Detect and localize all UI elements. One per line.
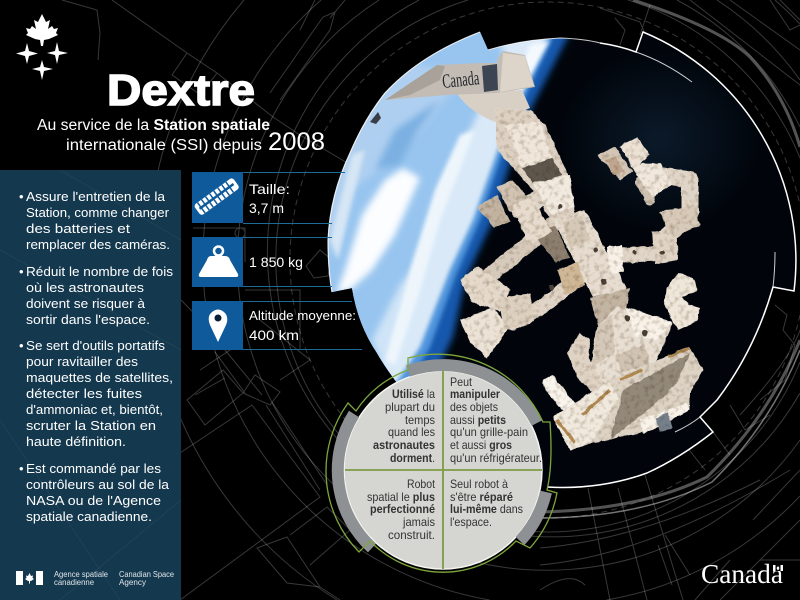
fact: most advanced robot — [367, 477, 436, 542]
left upper hand — [477, 195, 510, 228]
right arm hand cubes — [597, 147, 633, 180]
Dextre robot — [460, 108, 703, 450]
size text — [249, 181, 290, 216]
fact: handles small and large objects: qu'un réfrigérateur. — [450, 451, 542, 465]
stat: mass — [192, 237, 303, 287]
icon: wordmark flag — [773, 565, 783, 571]
fact: handles small and large objects — [450, 375, 542, 465]
agency name in French — [54, 570, 109, 587]
fact: used while astronauts sleep: dorment. — [390, 451, 435, 465]
fact: repaired itself — [450, 477, 523, 529]
fact: most advanced robot: jamais — [402, 515, 435, 529]
icon: right star — [47, 42, 68, 64]
fact: handles small and large objects: manipuler — [450, 387, 500, 401]
bullet: tools: scruter la Station en — [26, 418, 156, 433]
arm links — [490, 172, 690, 323]
bullet: tools: haute définition. — [26, 434, 126, 449]
agency name in English — [119, 570, 175, 587]
fact: used while astronauts sleep: quand les — [388, 425, 435, 439]
icon: maple leaf — [26, 14, 58, 46]
bullet: tools: maquettes de satellites, — [26, 370, 173, 385]
bolts and dark details — [548, 204, 664, 336]
fact: most advanced robot: construit. — [388, 528, 435, 542]
bullet: controllers: spatiale canadienne. — [26, 509, 152, 524]
logo: maple leaf and stars — [16, 14, 68, 80]
tool pallet — [553, 347, 703, 450]
Canada label on boom: Canada — [441, 67, 480, 93]
subtitle: Au service de la Station spatiale — [37, 117, 270, 134]
white rod — [542, 375, 575, 410]
agency name in French: Agence spatiale — [54, 570, 109, 579]
bullet: tools: Se sert d'outils portatifs — [26, 338, 166, 353]
fact: repaired itself: Seul robot à — [450, 477, 508, 491]
bullet: maintenance: des batteries et — [26, 221, 130, 236]
agency name in French: canadienne — [54, 578, 95, 587]
panel: description background — [0, 170, 181, 600]
centre block — [553, 210, 627, 297]
agency signature — [16, 570, 175, 587]
bullet: tools — [19, 338, 173, 449]
bullet: tools: d'ammoniac et, bientôt, — [26, 402, 163, 417]
icon: Dextre length — [192, 172, 243, 223]
cross divider — [345, 371, 542, 569]
bullet: controllers: NASA ou de l'Agence — [26, 493, 161, 508]
dark fragment at photo edge — [370, 112, 381, 124]
bullet: maintenance: Station, comme changer — [26, 205, 170, 220]
bullet: spacewalks: sortir dans l'espace. — [26, 312, 150, 327]
photo: Dextre in orbit above Earth — [328, 32, 795, 487]
earth and atmosphere — [328, 32, 572, 382]
light disc — [344, 371, 542, 569]
white photo frame arcs — [328, 32, 796, 487]
bullet: spacewalks: • — [19, 264, 24, 279]
bullet: tools: pour ravitailler des — [26, 354, 139, 369]
lower torso — [590, 306, 672, 384]
panel: bullet list — [19, 189, 174, 524]
fact: handles small and large objects: aussi petits — [450, 413, 506, 427]
fact: repaired itself: s'être réparé — [450, 490, 513, 504]
bullet: tools: détecter les fuites — [26, 386, 143, 401]
altitude text — [249, 308, 356, 343]
bullet: spacewalks: où les astronautes — [26, 280, 145, 295]
fact: used while astronauts sleep — [373, 387, 435, 465]
subtitle: 2008 — [268, 128, 325, 156]
fact: most advanced robot: spatial le plus — [367, 490, 435, 504]
stat: altitude — [192, 301, 356, 350]
icon: Canadian flag — [16, 571, 43, 585]
fact: used while astronauts sleep: astronautes — [373, 438, 435, 452]
bullet: controllers — [19, 461, 170, 524]
bullet: tools: • — [19, 338, 24, 353]
icon: weight — [192, 237, 243, 287]
bullet: controllers: contrôleurs au sol de la — [26, 477, 170, 492]
fact: handles small and large objects: qu'un grille-pain — [450, 425, 528, 439]
fact: most advanced robot: perfectionné — [370, 502, 435, 516]
fact: used while astronauts sleep: Utilisé la — [392, 387, 435, 401]
Canadarm2 boom — [385, 51, 535, 122]
icon: bottom star — [32, 60, 53, 80]
bullet: spacewalks — [19, 264, 174, 327]
icon: left star — [16, 43, 38, 64]
faint glow of space — [586, 74, 734, 206]
fact: handles small and large objects: des objets — [450, 400, 498, 414]
fact: used while astronauts sleep: temps — [405, 413, 435, 427]
bullet: maintenance: remplacer des caméras. — [26, 237, 170, 252]
fact: repaired itself: l'espace. — [450, 515, 492, 529]
bullet: controllers: • — [19, 461, 24, 476]
title: Dextre — [107, 66, 255, 115]
bullet: maintenance: • — [19, 189, 24, 204]
altitude text: 400 km — [249, 327, 299, 343]
fact: repaired itself: lui-même dans — [450, 502, 523, 516]
stat: size — [192, 172, 290, 223]
panel: facts circle — [326, 354, 557, 572]
gray ring segments — [338, 365, 546, 548]
subtitle: internationale (SSI) depuis — [66, 137, 262, 154]
trunk — [495, 108, 575, 228]
bullet: maintenance: Assure l'entretien de la — [26, 189, 166, 204]
mass text: 1 850 kg — [249, 254, 303, 270]
agency name in English: Canadian Space — [119, 570, 175, 579]
subtitle — [37, 117, 325, 156]
agency name in English: Agency — [119, 578, 146, 587]
green outline — [326, 354, 557, 572]
size text: Taille: — [249, 181, 290, 197]
fact: handles small and large objects: Peut — [450, 375, 473, 389]
small right hand — [664, 272, 700, 330]
small left arm — [567, 333, 604, 392]
bullet: maintenance — [19, 189, 170, 252]
stat row lines — [243, 172, 362, 350]
icon: location pin — [192, 301, 243, 350]
bullet: spacewalks: Réduit le nombre de fois — [26, 264, 174, 279]
Canada wordmark: Canada — [701, 559, 783, 589]
bullet: spacewalks: doivent se risquer à — [26, 296, 146, 311]
fact: used while astronauts sleep: plupart du — [385, 400, 435, 414]
fact: most advanced robot: Robot — [407, 477, 436, 491]
size text: 3,7 m — [249, 200, 284, 216]
fact: handles small and large objects: et aussi gros — [450, 438, 512, 452]
altitude text: Altitude moyenne: — [249, 308, 356, 323]
bullet: controllers: Est commandé par les — [26, 461, 162, 476]
left lower hands — [460, 266, 510, 312]
